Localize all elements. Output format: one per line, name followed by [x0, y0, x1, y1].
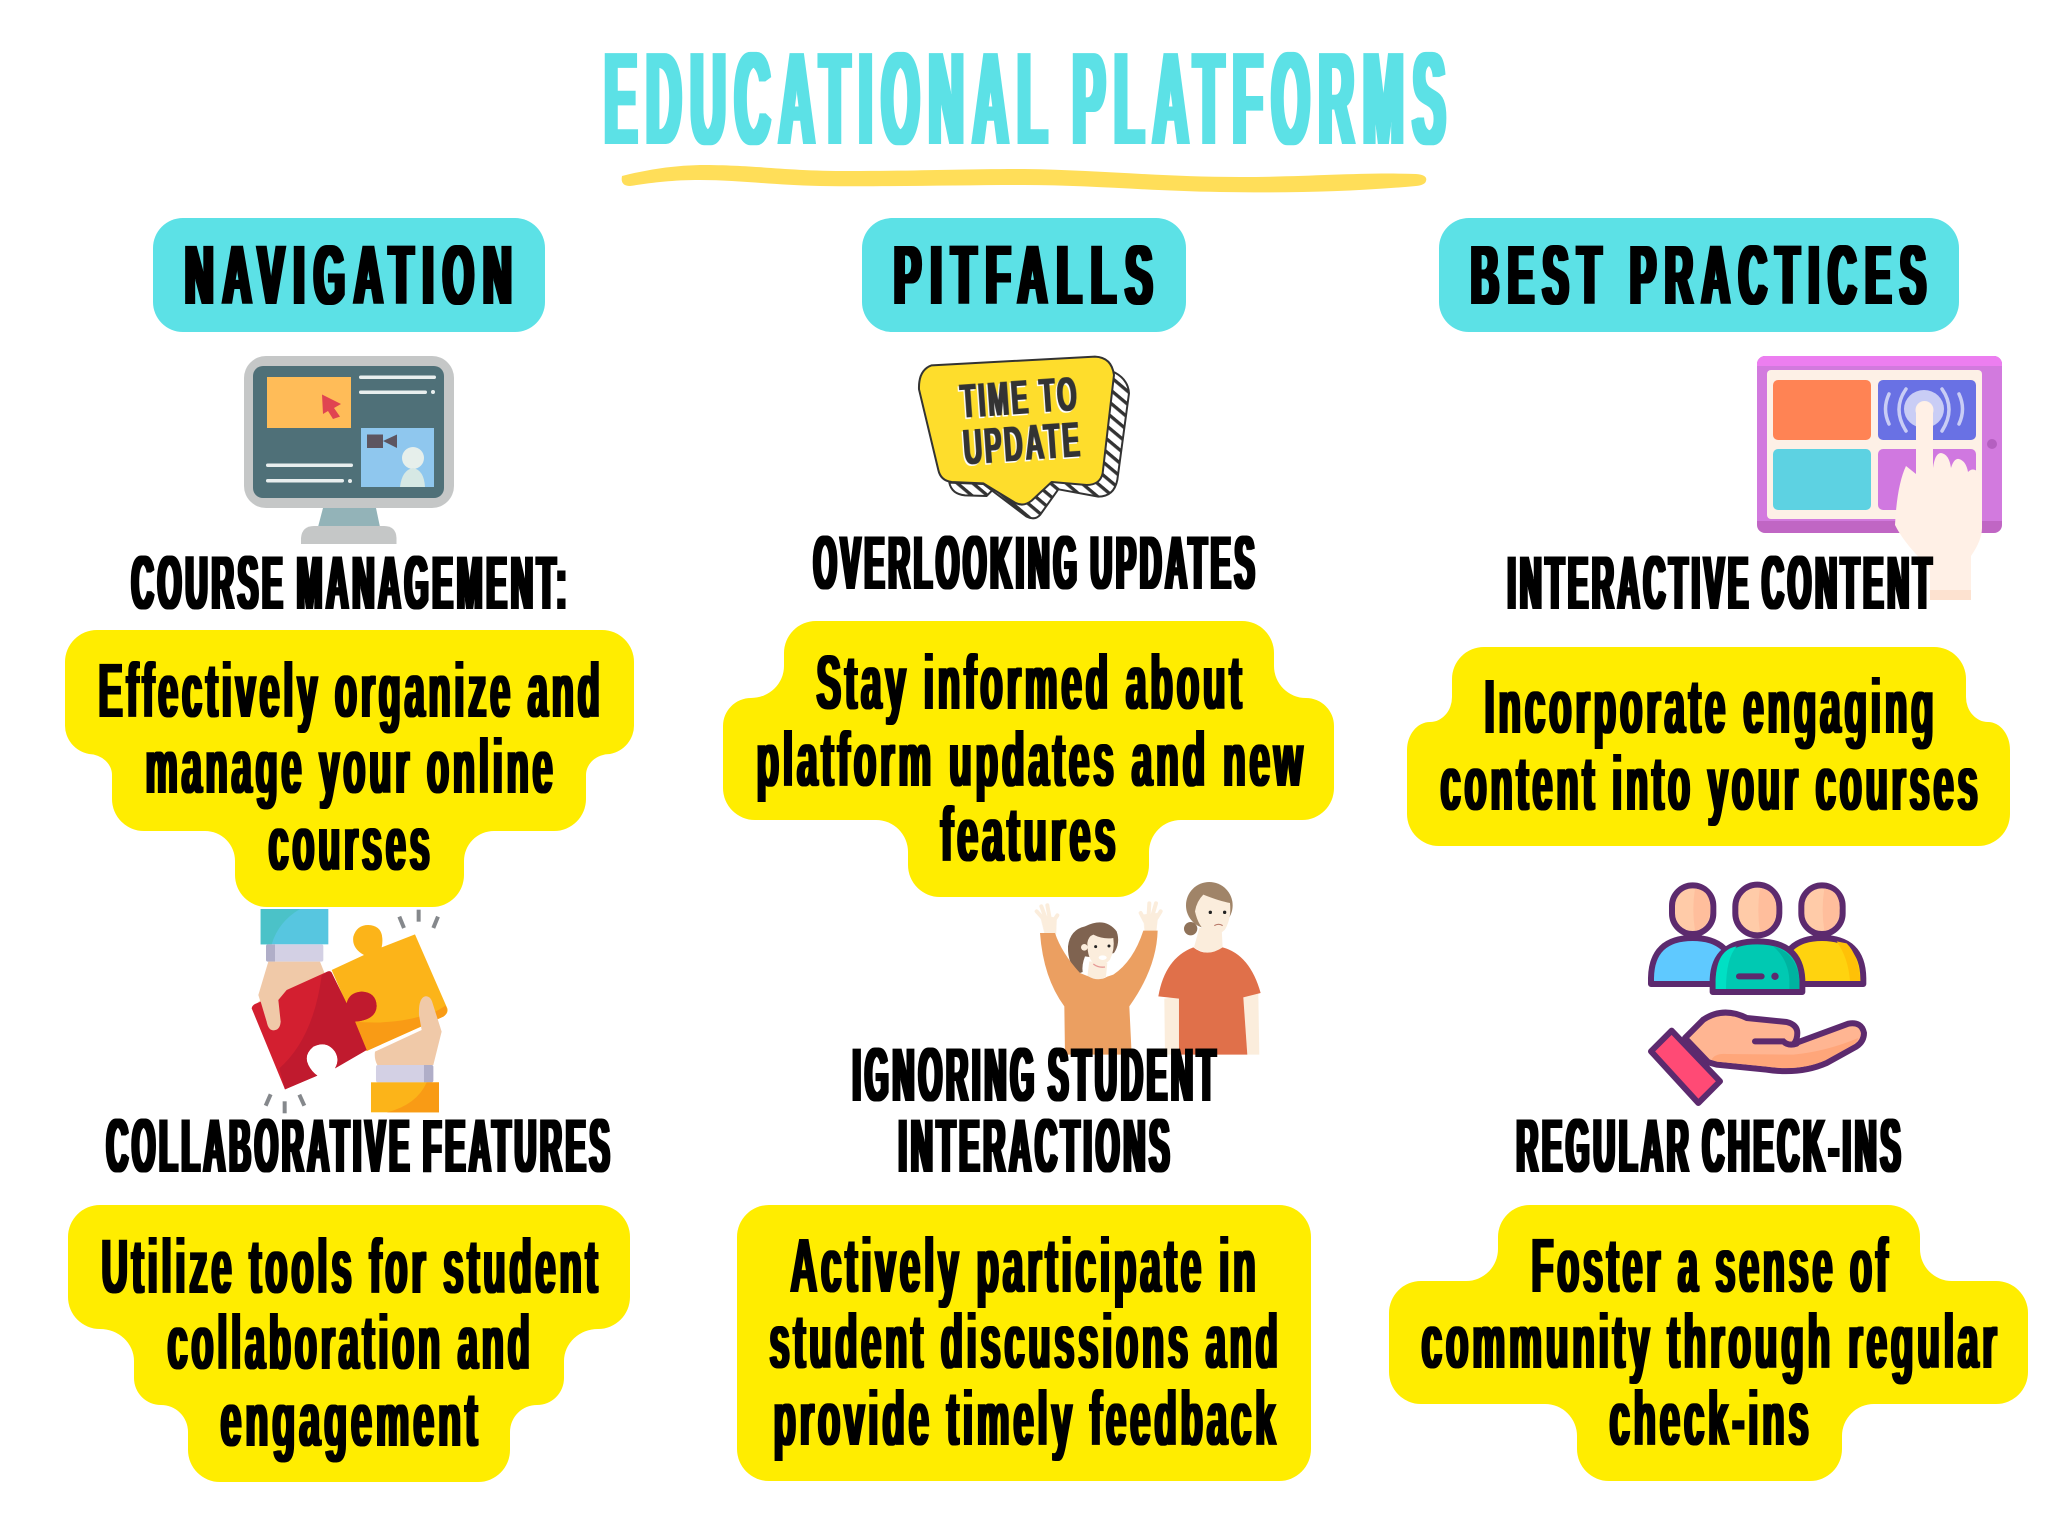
heading pill: navigation: [153, 218, 545, 332]
text: COLLABORATIVE FEATURES: [106, 1104, 614, 1189]
panel: pitfalls: [723, 218, 1334, 1481]
callout: course management: courses: [268, 801, 434, 887]
icon: time to update speech bubble: [919, 357, 1129, 518]
icon: tablet with tapping hand: [1757, 356, 2002, 600]
callout: course management: manage your online: [146, 724, 556, 810]
callout: collaborative features: collaboration and: [168, 1300, 534, 1386]
icon: time to update speech bubble: UPDATE: [962, 411, 1084, 476]
callout: overlooking updates: features: [940, 792, 1120, 878]
title underline: [622, 165, 1426, 192]
icon: time to update speech bubble: TIME TO: [959, 367, 1081, 429]
callout: course management: [65, 630, 634, 907]
callout: overlooking updates: platform updates and new: [756, 717, 1306, 803]
panel: navigation: [65, 218, 634, 1482]
text: Effectively organize and: [98, 648, 604, 734]
callout: collaborative features: engagement: [220, 1377, 482, 1463]
callout: overlooking updates: [723, 621, 1334, 897]
subheading: ignoring student interactions: [852, 1033, 1220, 1189]
icon: community group above open hand: [1651, 885, 1864, 1103]
panel: best practices: [1389, 218, 2028, 1481]
heading pill: navigation: NAVIGATION: [185, 228, 521, 322]
text: COURSE MANAGEMENT:: [132, 541, 570, 626]
callout: ignoring student interactions: provide timely feedback: [774, 1376, 1280, 1462]
icon: time to update speech bubble: TIME TO: [958, 368, 1080, 430]
heading pill: pitfalls: [862, 218, 1186, 332]
callout: ignoring student interactions: [737, 1205, 1311, 1481]
callout: interactive content: [1407, 647, 2010, 846]
callout: collaborative features: [68, 1205, 630, 1482]
icon: computer monitor: [244, 356, 454, 544]
callout: regular check-ins: check-ins: [1610, 1376, 1812, 1462]
panel: pitfalls: IGNORING STUDENT: [852, 1033, 1220, 1118]
icon: time to update speech bubble: UPDATE: [960, 413, 1083, 477]
callout: overlooking updates: Stay informed about: [816, 640, 1246, 726]
icon: two women, one raising her arms: [1037, 882, 1261, 1055]
icon: hands joining puzzle pieces: [252, 909, 448, 1113]
panel: pitfalls: student discussions and: [770, 1299, 1282, 1385]
panel: pitfalls: INTERACTIONS: [898, 1104, 1174, 1189]
callout: collaborative features: Utilize tools for student: [102, 1224, 602, 1310]
text: OVERLOOKING UPDATES: [814, 521, 1258, 606]
heading pill: best practices: [1439, 218, 1959, 332]
callout: regular check-ins: [1389, 1205, 2028, 1481]
callout: ignoring student interactions: Actively participate in: [790, 1223, 1260, 1309]
heading pill: pitfalls: PITFALLS: [894, 228, 1162, 322]
